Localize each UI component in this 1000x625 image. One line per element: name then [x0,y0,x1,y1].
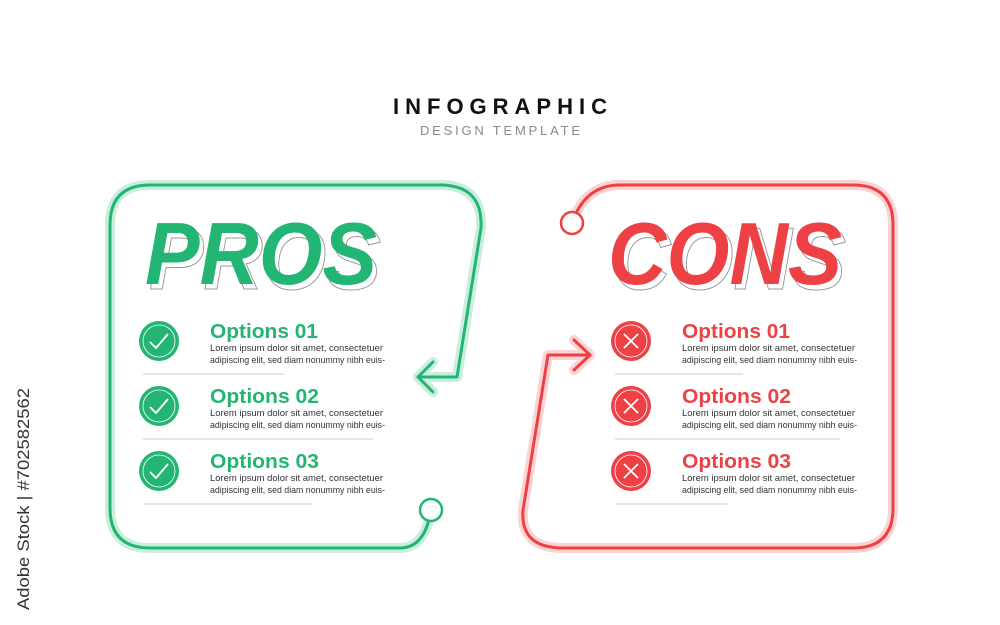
pros item 1: Options 01 [210,321,318,343]
cons item 1 [611,321,857,374]
pros item 1: Lorem ipsum dolor sit amet, consectetuer [210,343,383,354]
icon: start circle [561,212,583,234]
heading: CONS: CONS [612,209,846,308]
panel: cons frame [523,185,893,548]
heading: PROS: PROS [149,209,381,308]
cons item 3: Options 03 [682,451,791,473]
cons item 3: Lorem ipsum dolor sit amet, consectetuer [682,473,855,484]
pros item 3: Options 03 [210,451,319,473]
cons item 3: adipiscing elit, sed diam nonummy nibh euis- [682,485,857,496]
title: DESIGN TEMPLATE [420,123,580,138]
watermark id: Adobe Stock | #702582562 [14,388,33,610]
cons item 3 [611,451,857,504]
title: INFOGRAPHIC [393,94,607,119]
pros item 2: adipiscing elit, sed diam nonummy nibh euis- [210,420,385,431]
cons item 2: Options 02 [682,386,791,408]
cons item 2 [611,386,857,439]
pros item 3: Lorem ipsum dolor sit amet, consectetuer [210,473,383,484]
pros item 3 [139,451,385,504]
pros item 2 [139,386,385,439]
cons item 2: Lorem ipsum dolor sit amet, consectetuer [682,408,855,419]
list: cons [611,321,857,504]
pros item 1 [139,321,385,374]
icon: start circle [420,499,442,521]
panel: pros frame [110,185,481,548]
cons item 1: adipiscing elit, sed diam nonummy nibh euis- [682,355,857,366]
cons item 1: Options 01 [682,321,790,343]
cons item 1: Lorem ipsum dolor sit amet, consectetuer [682,343,855,354]
list: pros [139,321,385,504]
heading: CONS: CONS [608,204,842,303]
cons item 2: adipiscing elit, sed diam nonummy nibh euis- [682,420,857,431]
pros item 1: adipiscing elit, sed diam nonummy nibh euis- [210,355,385,366]
pros item 3: adipiscing elit, sed diam nonummy nibh euis- [210,485,385,496]
heading: PROS: PROS [145,204,377,303]
title [393,94,607,138]
pros item 2: Options 02 [210,386,319,408]
pros item 2: Lorem ipsum dolor sit amet, consectetuer [210,408,383,419]
